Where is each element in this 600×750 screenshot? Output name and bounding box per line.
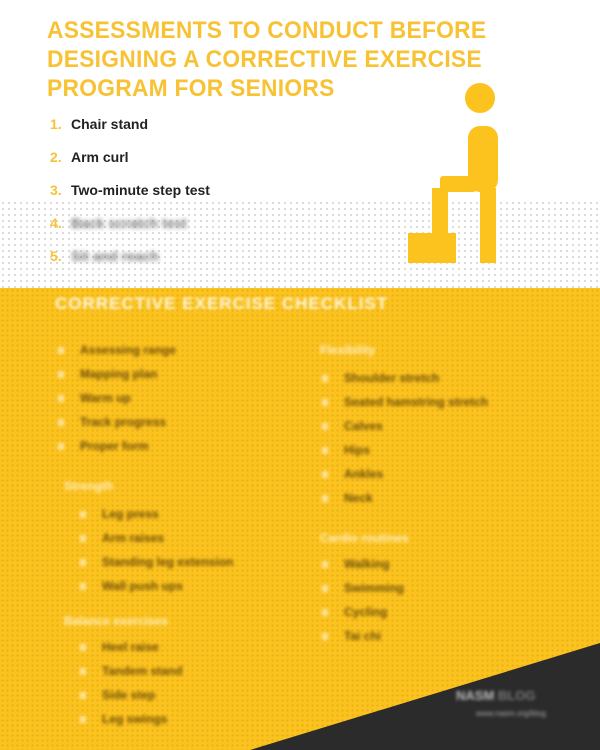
right column list: Cycling	[344, 605, 387, 619]
right column list: Walking	[344, 557, 390, 571]
icon: person stepping	[408, 83, 498, 263]
left column list: Strength	[64, 479, 113, 493]
right column list: Calves	[344, 419, 383, 433]
assessment list: Two-minute step test	[71, 182, 210, 198]
dark corner triangle	[250, 643, 600, 750]
right column list: Tai chi	[344, 629, 381, 643]
title: PROGRAM FOR SENIORS	[47, 75, 335, 102]
assessment list: 4.	[50, 215, 62, 231]
left column list: Balance exercises	[64, 614, 168, 628]
left column list: Tandem stand	[102, 664, 182, 678]
right column list: Shoulder stretch	[344, 371, 439, 385]
left column list: Side step	[102, 688, 155, 702]
left column list: Leg press	[102, 507, 159, 521]
right column list: Flexibility	[320, 343, 375, 357]
logo: www.nasm.org/blog	[476, 709, 546, 718]
assessment list: 3.	[50, 182, 62, 198]
title: DESIGNING A CORRECTIVE EXERCISE	[47, 46, 482, 73]
assessment list: 2.	[50, 149, 62, 165]
assessment list: Sit and reach	[71, 248, 159, 264]
logo	[454, 688, 548, 719]
yellow panel	[0, 288, 600, 750]
right column list	[318, 343, 490, 643]
right column list: Swimming	[344, 581, 404, 595]
right column list: Neck	[344, 491, 373, 505]
assessment list: Back scratch test	[71, 215, 187, 231]
right column list: Hips	[344, 443, 370, 457]
left column list: Wall push ups	[102, 579, 183, 593]
assessment list: Chair stand	[71, 116, 148, 132]
left column list: Warm up	[80, 391, 131, 405]
left column list	[56, 343, 235, 728]
left column list: Leg swings	[102, 712, 167, 726]
assessment list: 5.	[50, 248, 62, 264]
assessment list: Arm curl	[71, 149, 129, 165]
title: ASSESSMENTS TO CONDUCT BEFORE	[47, 17, 486, 44]
left column list: Standing leg extension	[102, 555, 233, 569]
right column list: Cardio routines	[320, 531, 409, 545]
right column list: Seated hamstring stretch	[344, 395, 488, 409]
assessment list: 1.	[50, 116, 62, 132]
left column list: Arm raises	[102, 531, 164, 545]
title	[47, 17, 486, 102]
left column list: Mapping plan	[80, 367, 157, 381]
logo: NASM BLOG	[456, 688, 535, 703]
right column list: Ankles	[344, 467, 383, 481]
left column list: Heel raise	[102, 640, 159, 654]
left column list: Proper form	[80, 439, 149, 453]
left column list: Track progress	[80, 415, 166, 429]
panel heading: CORRECTIVE EXERCISE CHECKLIST	[55, 294, 388, 313]
left column list: Assessing range	[80, 343, 176, 357]
assessment list	[50, 116, 210, 264]
